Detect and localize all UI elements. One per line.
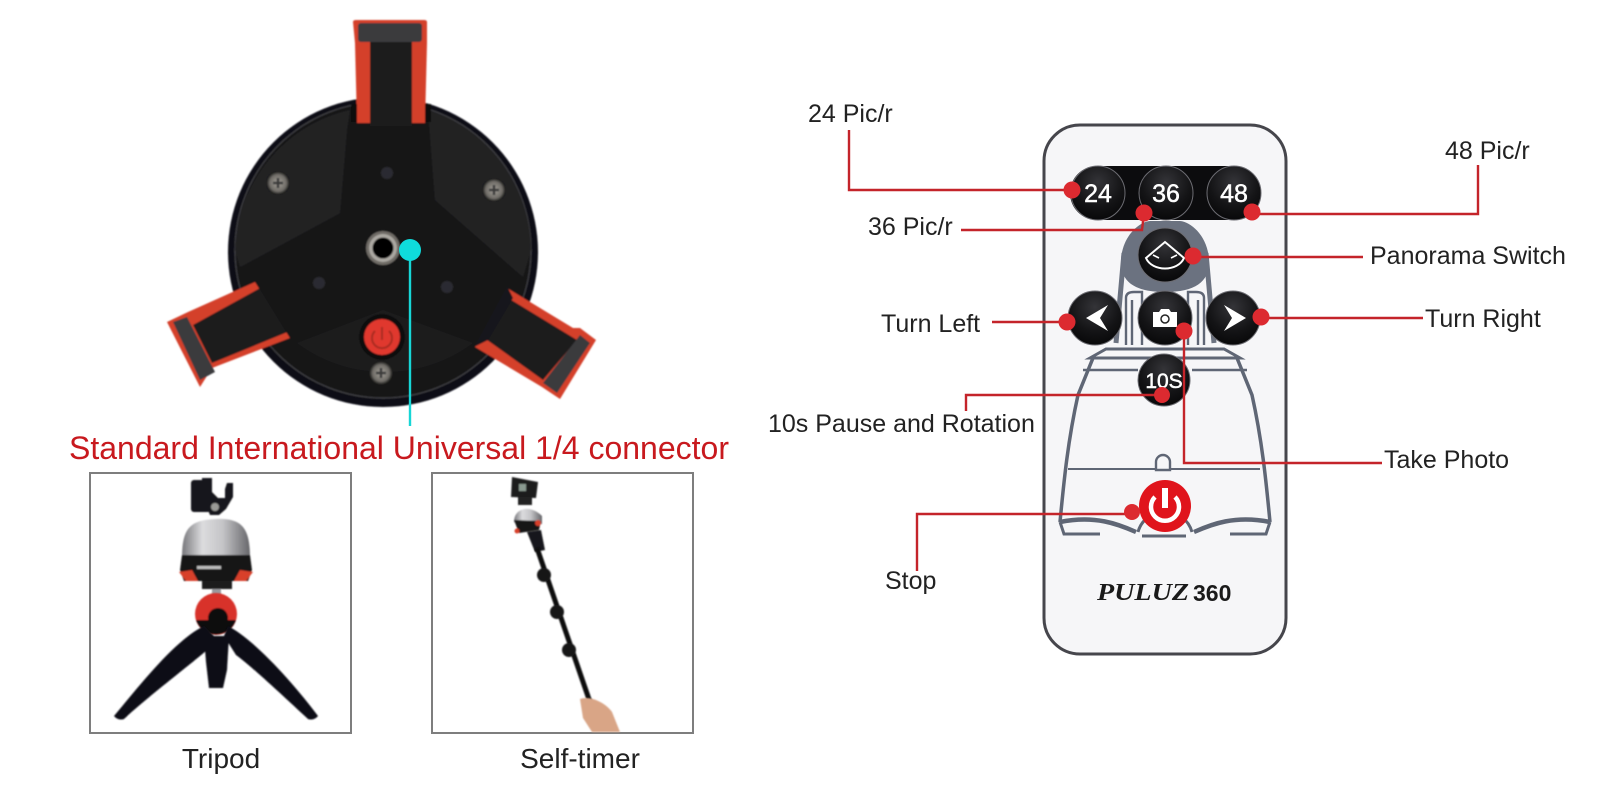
heading: connector: Standard International Universal 1/4 connector bbox=[69, 430, 729, 466]
callout: Stop bbox=[885, 504, 1140, 595]
cyan leader to socket bbox=[399, 239, 421, 426]
threaded socket bbox=[366, 231, 400, 265]
button 24: 24 bbox=[1084, 180, 1112, 208]
hand bbox=[580, 698, 620, 732]
callout: Stop: Stop bbox=[885, 567, 936, 595]
callout: 24 Pic/r: 24 Pic/r bbox=[808, 100, 893, 128]
callout: 48 Pic/r bbox=[1244, 137, 1530, 220]
callout: 10s Pause and Rotation: 10s Pause and Rotation bbox=[768, 410, 1035, 438]
remote control bbox=[1044, 125, 1286, 654]
button right bbox=[1206, 291, 1260, 345]
callout: Panorama Switch bbox=[1184, 242, 1566, 270]
preset bar bbox=[1070, 166, 1260, 220]
phone mount bbox=[191, 478, 233, 515]
button 10S bbox=[1138, 354, 1190, 406]
button 10S: 10S bbox=[1145, 370, 1183, 393]
remote body bbox=[1044, 125, 1286, 654]
button 36: 36 bbox=[1152, 180, 1180, 208]
brand: 360 bbox=[1193, 580, 1231, 606]
callout: Turn Left bbox=[881, 310, 1076, 338]
right phone clamp bbox=[474, 286, 596, 399]
line drawing of head bbox=[1060, 221, 1270, 536]
callout: Turn Right bbox=[1252, 305, 1541, 333]
callout: Turn Left: Turn Left bbox=[881, 310, 980, 338]
tripod legs bbox=[114, 626, 318, 720]
head on stick bbox=[514, 509, 545, 552]
rotating head bbox=[179, 519, 253, 598]
callout: Take Photo: Take Photo bbox=[1384, 446, 1509, 474]
callout: Turn Right: Turn Right bbox=[1425, 305, 1541, 333]
button camera bbox=[1138, 291, 1192, 345]
red power button bbox=[359, 314, 405, 360]
extension pole bbox=[537, 548, 596, 722]
panel: tripod bbox=[90, 473, 351, 733]
disc body bbox=[228, 97, 538, 407]
button 48: 48 bbox=[1220, 180, 1248, 208]
callout: 48 Pic/r: 48 Pic/r bbox=[1445, 137, 1530, 165]
panel: self-timer bbox=[432, 473, 693, 733]
button 36 bbox=[1139, 166, 1193, 220]
callout: Take Photo bbox=[1176, 322, 1509, 474]
left phone clamp bbox=[167, 280, 300, 387]
brand: PULUZ bbox=[1096, 580, 1189, 606]
button power bbox=[1139, 480, 1191, 532]
callout: 36 Pic/r bbox=[868, 204, 1152, 241]
label: self-timer: Self-timer bbox=[520, 743, 640, 774]
callout: Panorama Switch: Panorama Switch bbox=[1370, 242, 1566, 270]
label: tripod: Tripod bbox=[182, 743, 260, 774]
button 24 bbox=[1071, 166, 1125, 220]
button left bbox=[1068, 291, 1122, 345]
brand bbox=[1096, 580, 1231, 606]
button panorama bbox=[1138, 228, 1192, 282]
top phone clamp bbox=[351, 20, 431, 126]
callout: 24 Pic/r bbox=[808, 100, 1080, 198]
button 48 bbox=[1207, 166, 1261, 220]
ball joint bbox=[195, 593, 237, 635]
action camera bbox=[511, 477, 538, 505]
screws bbox=[266, 171, 506, 385]
callout: 36 Pic/r: 36 Pic/r bbox=[868, 213, 953, 241]
callout: 10s Pause and Rotation bbox=[768, 387, 1170, 438]
moulded dimples bbox=[313, 167, 453, 293]
product photo: underside of panoramic head bbox=[167, 20, 596, 407]
